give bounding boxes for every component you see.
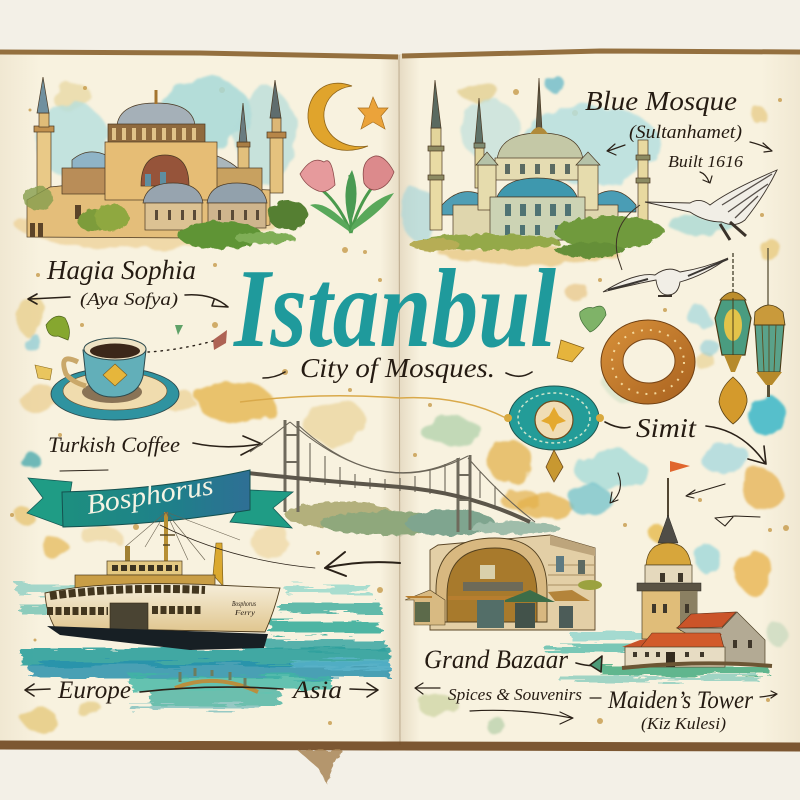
icon: Turkish coffee cup: [51, 338, 213, 420]
label: Hagia Sophia: Hagia Sophia: [46, 255, 196, 285]
scattered small arrows: [60, 470, 760, 526]
arrow: Turkish Coffee: [193, 436, 262, 455]
label: Blue Mosque: Blue Mosque: [585, 86, 737, 116]
illustration: Bosphorus Bridge: [248, 420, 560, 536]
icon: evil eye amulet: [240, 386, 604, 482]
illustration: seagull lower: [603, 258, 728, 296]
big arrow left: [160, 525, 400, 576]
label: Europe: Europe: [57, 677, 131, 704]
label: Grand Bazaar: Grand Bazaar: [424, 645, 569, 674]
label: Spices and Souvenirs: Spices & Souvenirs: [448, 685, 582, 704]
illustration: ferry: [45, 512, 280, 650]
arrows: Blue Mosque: [607, 142, 772, 183]
illustration: Maiden's Tower: [545, 461, 772, 682]
label: Simit: Simit: [636, 413, 698, 443]
illustration: ferry: Ferry: [234, 609, 256, 617]
illustration: Blue Mosque: [400, 78, 665, 270]
arrows: Spices and Souvenirs: [415, 683, 777, 724]
label: Kiz Kulesi: (Kiz Kulesi): [641, 714, 726, 733]
arrows: Europe and Asia: [25, 683, 378, 697]
illustration: water: [18, 585, 390, 710]
arrow: Grand Bazaar: [576, 656, 602, 672]
ink speckles: [10, 86, 789, 725]
title: Istanbul: [232, 247, 556, 371]
subtitle: City of Mosques.: [300, 353, 495, 383]
label: Aya Sofya: (Aya Sofya): [80, 289, 178, 310]
label: Maiden's Tower: Maiden’s Tower: [607, 687, 753, 714]
icon: crescent and star: [308, 83, 388, 150]
label: Turkish Coffee: Turkish Coffee: [48, 432, 180, 457]
illustration: seagull upper: [645, 170, 777, 240]
arrows: Hagia Sophia: [28, 294, 228, 307]
illustration: lantern left: [715, 253, 751, 424]
decorative leaf icons: [35, 306, 606, 380]
banner: Bosphorus: [27, 470, 293, 528]
icon: simit bread ring: [601, 320, 695, 404]
label: Built 1616: Built 1616: [668, 152, 744, 171]
illustration: ferry: Bosphorus: [232, 600, 256, 608]
banner: Bosphorus: Bosphorus: [84, 470, 216, 521]
illustration: Grand Bazaar: [405, 535, 602, 630]
illustration: Hagia Sophia: [15, 77, 308, 249]
label: Sultanhamet: (Sultanhamet): [629, 122, 742, 143]
arrow: Simit: [605, 422, 766, 464]
label: Asia: Asia: [291, 677, 342, 704]
illustration: lantern right: [754, 248, 785, 397]
watercolor stains: [16, 76, 786, 733]
icon: tulips: [300, 156, 394, 233]
subtitle flourishes: [263, 372, 532, 378]
